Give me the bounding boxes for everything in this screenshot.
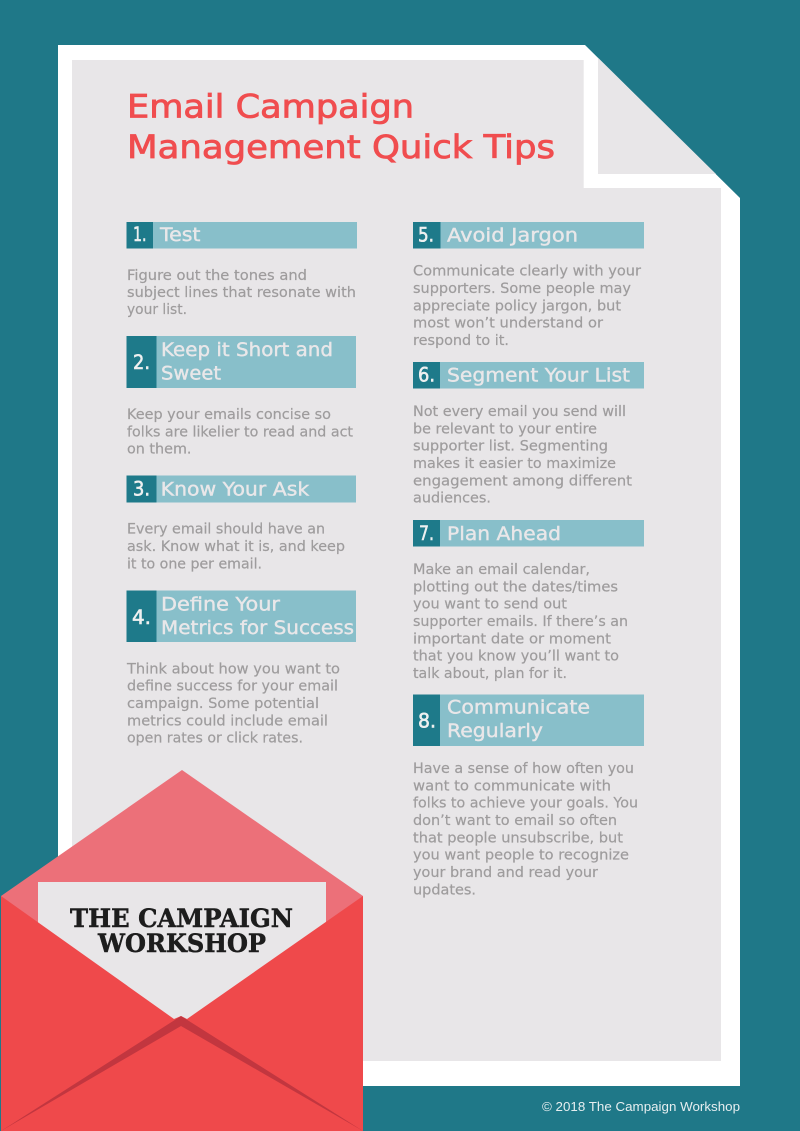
tip 4 text: campaign. Some potential (127, 696, 319, 712)
tip 7 heading (413, 520, 644, 546)
tip 7 heading: Plan Ahead (447, 524, 561, 545)
tip 7 text: that you know you’ll want to (413, 649, 619, 665)
tip 3 text: it to one per email. (127, 556, 262, 572)
tip 7 text: important date or moment (413, 631, 612, 647)
tip 8 text: Have a sense of how often you (413, 761, 634, 777)
tip 1 heading: Test (159, 225, 200, 246)
tip 3 text (127, 522, 345, 572)
tip 1 text (127, 268, 356, 318)
tip 6 text: supporter list. Segmenting (413, 439, 608, 455)
tip 3 heading (126, 476, 356, 502)
tip 1 text: Figure out the tones and (127, 268, 307, 284)
tip 5 text: supporters. Some people may (413, 281, 631, 297)
document sheet with folded corner (58, 45, 740, 1086)
tip 5 text: respond to it. (413, 333, 509, 349)
tip 6 heading: 6. (418, 364, 435, 387)
tip 8 text: your brand and read your (413, 865, 598, 881)
tip 4 text: define success for your email (127, 679, 338, 695)
envelope bottom flap crease (1, 1016, 363, 1131)
tip 4 heading: Metrics for Success (161, 618, 354, 639)
tip 8 heading: Communicate (447, 697, 590, 718)
tip 4 text: Think about how you want to (126, 661, 340, 677)
tip 8 text: don’t want to email so often (413, 813, 617, 829)
tip 1 heading: 1. (133, 223, 146, 246)
tip 8 heading: 8. (418, 710, 436, 733)
title (127, 88, 555, 166)
tip 7 heading: 7. (419, 522, 434, 545)
tip 5 text: appreciate policy jargon, but (413, 298, 622, 314)
tip 5 text: Communicate clearly with your (413, 264, 641, 280)
tip 7 text: you want to send out (413, 597, 568, 613)
tip 4 heading (126, 590, 356, 642)
icon: open red envelope with logo letter (1, 770, 363, 1131)
tip 7 text: Make an email calendar, (413, 562, 590, 578)
tip 3 text: Every email should have an (127, 522, 325, 538)
tip 2 heading (126, 336, 356, 388)
envelope back flap (1, 770, 363, 1000)
tip 6 text (413, 404, 633, 507)
title: Email Campaign (127, 88, 414, 126)
tip 7 text: plotting out the dates/times (413, 579, 618, 595)
tip 6 text: Not every email you send will (413, 404, 626, 420)
tip 5 text: most won’t understand or (413, 316, 603, 332)
title: Management Quick Tips (127, 128, 555, 166)
tip 4 text: open rates or click rates. (127, 731, 303, 747)
tip 8 text: that people unsubscribe, but (413, 830, 624, 846)
letter with logo (38, 882, 326, 1022)
tip 7 text (413, 562, 628, 682)
envelope front pocket (1, 896, 363, 1131)
tip 4 text: metrics could include email (127, 713, 328, 729)
tip 2 text: Keep your emails concise so (127, 407, 331, 423)
envelope bottom flap (1, 1026, 363, 1131)
tip 8 text: updates. (413, 882, 476, 898)
tip 8 heading: Regularly (447, 721, 543, 742)
tip 2 text: folks are likelier to read and act (127, 424, 354, 440)
tip 1 heading (126, 222, 357, 248)
letter with logo: THE CAMPAIGN (70, 904, 293, 933)
tip 8 text: you want people to recognize (413, 848, 629, 864)
tip 3 heading: Know Your Ask (161, 480, 309, 501)
tip 6 text: be relevant to your entire (413, 421, 597, 437)
tip 6 text: engagement among different (413, 473, 633, 489)
tip 5 heading: 5. (418, 224, 434, 246)
tip 5 text (413, 264, 641, 349)
tip 5 heading (413, 222, 644, 248)
tip 1 text: subject lines that resonate with (127, 285, 356, 301)
tip 7 text: talk about, plan for it. (413, 666, 567, 682)
tip 1 text: your list. (127, 302, 187, 318)
copyright footer: © 2018 The Campaign Workshop (542, 1099, 740, 1114)
tip 6 heading: Segment Your List (447, 366, 630, 387)
tip 6 heading (413, 362, 644, 388)
tip 4 text (126, 661, 340, 747)
tip 8 text: folks to achieve your goals. You (413, 796, 638, 812)
tip 7 text: supporter emails. If there’s an (413, 614, 628, 630)
tip 8 text: want to communicate with (413, 778, 611, 794)
tip 3 heading: 3. (133, 478, 150, 501)
tip 6 text: audiences. (413, 491, 491, 507)
tip 4 heading: Define Your (161, 595, 280, 616)
letter with logo: WORKSHOP (97, 929, 266, 958)
tip 6 text: makes it easier to maximize (413, 456, 616, 472)
tip 2 heading: Keep it Short and (161, 340, 333, 361)
tip 5 heading: Avoid Jargon (447, 226, 578, 246)
tip 8 text (413, 761, 638, 898)
tip 3 text: ask. Know what it is, and keep (127, 539, 345, 555)
tip 4 heading: 4. (132, 606, 151, 629)
tip 2 heading: Sweet (161, 363, 221, 384)
tip 2 heading: 2. (133, 351, 150, 374)
tip 2 text: on them. (127, 442, 192, 458)
tip 2 text (127, 407, 354, 458)
tip 8 heading (413, 694, 644, 746)
